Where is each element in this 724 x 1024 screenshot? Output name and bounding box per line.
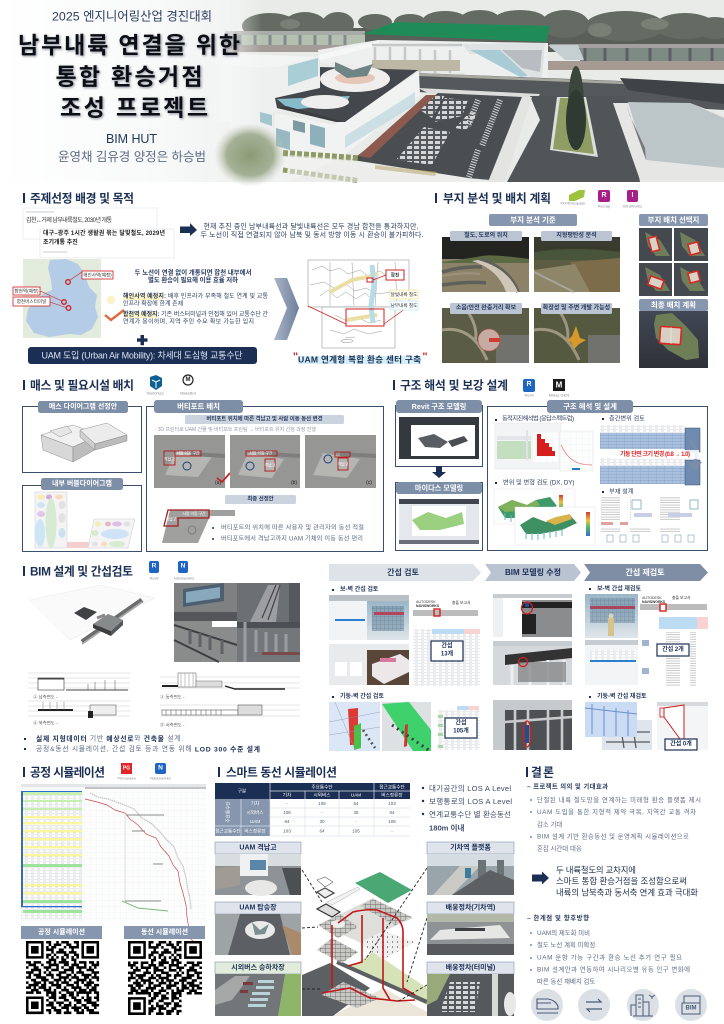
news card 1: 김천↔거제 남부내륙철도, 2030년 개통: [26, 216, 112, 224]
poster title: 통합 환승거점: [56, 64, 202, 90]
clash count 0: 간섭 0개: [670, 740, 692, 748]
image: terrain: [534, 237, 620, 292]
re-check: beam-wall: 보-벽 간섭 재검토: [597, 584, 641, 592]
elevation: south: [28, 673, 130, 700]
member design: 부재 설계: [609, 488, 634, 496]
distance table: 103: [283, 828, 291, 834]
software icons: R: [526, 381, 532, 388]
software icons: Revit: [524, 392, 534, 398]
distance table: 시외버스: [314, 792, 330, 798]
story drift review: 기둥 단면 크기 변경 (0.8 → 1.0): [620, 450, 690, 458]
photo b: [230, 435, 300, 488]
clash count 13: 13개: [441, 650, 453, 658]
UAM bar: [28, 347, 257, 364]
hero render: right building: [613, 102, 724, 180]
displacement review: [494, 478, 595, 545]
photo c: 격납고: [337, 460, 349, 466]
photo b: 사람 이동 구간: [249, 450, 273, 456]
response spectrum: 동적지진해석법 (응답스펙트럼): [502, 414, 574, 422]
modeling fix images: [493, 594, 572, 750]
image: final layout: [639, 311, 708, 368]
hero render: tree line: [242, 10, 724, 52]
pill: layout options: 부지 배치 선택지: [648, 216, 699, 224]
label pills for site images: 소음/안전 완충거리 확보: [456, 304, 517, 312]
distance table: UAM: [351, 792, 361, 798]
tile: intercity bus: 시외버스 승하차장: [231, 962, 285, 972]
team name: BIM HUT: [106, 132, 157, 146]
final selection model: 사람 이동 구간: [182, 511, 206, 516]
distance table: 103: [388, 801, 396, 806]
software icons: [146, 375, 197, 396]
distance table: 64: [319, 828, 325, 834]
software icons: N: [158, 764, 163, 772]
icon: exchange arrows: [578, 989, 610, 1021]
map labels: [13, 271, 113, 306]
bubbles: [35, 492, 135, 548]
pill: final layout: [639, 299, 708, 311]
UAM centre slogan: [293, 351, 428, 364]
elevation: north: ④ 북측면도 -: [33, 720, 58, 726]
panel: midas modeling: [396, 482, 482, 550]
poster title: 남부내륙 연결을 위한: [18, 32, 240, 58]
re-check: beam-wall: [585, 584, 708, 686]
elevation: west: [160, 705, 300, 728]
subheading pill: 버티포트 위치에 따른 격납고 및 사람 이동 동선 변경: [206, 414, 323, 422]
clash: beam-wall: [329, 585, 480, 686]
news card 2: [40, 229, 174, 258]
site reason text: 두 노선이 연결 없이 개통되면 합천 내부에서: [134, 268, 252, 276]
label pills for site images: [450, 231, 612, 314]
elevation: south: ② 남측면도 -: [33, 694, 58, 700]
tile: drop-off at station: 배웅정차(기차역): [446, 902, 495, 912]
image: expandability: [534, 308, 620, 363]
step arrow: modeling fix: BIM 모델링 수정: [505, 567, 561, 577]
LOS bullets: 보행통로의 LOS A Level: [429, 796, 512, 806]
photo b: (b): [291, 480, 297, 486]
UAM bar: UAM 도입 (Urban Air Mobility): 차세대 도심형 교통수단: [42, 350, 242, 360]
heading: 구조 해석 및 보강 설계: [400, 378, 508, 392]
photo a: (a): [215, 480, 221, 486]
LOS bullets: 180m 이내: [429, 822, 465, 832]
distance table: 주요통수단: [311, 784, 333, 790]
hero render: roads and parking: [352, 73, 724, 182]
re-check: column-wall: [585, 692, 708, 750]
panel: vertiport: 버티포트 배치: [177, 402, 220, 411]
midas screenshot: [399, 499, 479, 544]
axonometric exploded model: [302, 868, 427, 1016]
distance table: 접근교통수단: [379, 784, 405, 790]
news card 2: 조기개통 추진: [43, 238, 78, 246]
distance table: 30: [319, 819, 325, 824]
BIM bullets: [24, 734, 260, 753]
step arrow: re-check: 간섭 재검토: [625, 567, 665, 577]
section: clash review: [329, 564, 708, 751]
tile: rail platform: 기차역 플랫폼: [450, 842, 491, 852]
hero render: station building: [318, 22, 584, 78]
clash count 2: 간섭 2개: [662, 645, 684, 653]
significance list: 감소 기대: [537, 820, 562, 828]
hero render: pergolas: [225, 31, 724, 70]
photo b: 격납고: [264, 462, 276, 468]
clash report: NAVISWORKS: [416, 604, 440, 608]
UAM centre slogan: UAM 연계형 복합 환승 센터 구축: [298, 354, 421, 364]
icon: train: [531, 989, 563, 1021]
image: noise buffer: [442, 308, 529, 363]
panel: mass diagram: 매스 다이어그램 선정안: [49, 402, 118, 410]
poster title: 조성 프로젝트: [60, 94, 208, 120]
arrow: down: [432, 466, 446, 478]
software icons: N: [181, 562, 186, 570]
significance list: UAM 도입을 통한 지형적 제약 극복, 지역간 교통 격차: [537, 807, 696, 816]
label pills for site images: 확장성 및 주변 개발 가능성: [543, 304, 610, 312]
news card 2: 대구–광주 1시간 생활권 묶는 달빛철도, 2029년: [43, 229, 165, 237]
tile: drop-off at terminal: 배웅정차(터미널): [446, 962, 495, 972]
icon: BIM building: BIM: [686, 1006, 696, 1012]
clash report: AUTODESK: [416, 600, 436, 604]
site reason text: 별도 환승이 필요해 이용 효율 저하: [148, 275, 238, 284]
team members: 윤영채 김유경 양정은 하승범: [58, 150, 206, 164]
limitations list: BIM 설계안과 연동하여 시나리오별 유동 인구 변화에: [537, 964, 690, 974]
image: rail and road: [442, 237, 529, 292]
software icons: R: [152, 562, 157, 570]
poster title: [18, 32, 240, 120]
heading: 주제선정 배경 및 목적: [30, 192, 134, 206]
distance table: 버스정류장: [381, 792, 403, 798]
distance table: [215, 783, 410, 836]
distance table: -: [355, 819, 357, 824]
software icons: ReCap: [598, 204, 611, 208]
revit screenshot: [399, 417, 479, 459]
map labels: 합천역(예정): [14, 288, 39, 294]
re-check: column-wall: 기둥-벽 간섭 재검토: [597, 692, 647, 700]
photo c: [305, 435, 376, 488]
software icons: [149, 561, 194, 580]
step arrow: re-check: [584, 564, 708, 581]
distance table: 구분: [238, 788, 246, 794]
limitations list: UAM 운항 가능 구간과 환승 노선 추가 연구 필요: [537, 952, 682, 962]
BIM bullets: 실제 지형데이터 기반 예상선로와 건축물 설계.: [36, 734, 183, 742]
background statement: 두 노선이 직접 연결되지 않아 남북 및 동서 방향 이동 시 환승이 불가피하다.: [200, 230, 424, 239]
interior renders: [174, 583, 300, 662]
label: Dalbit line: 달빛내륙 철도: [391, 291, 417, 298]
BIM bullets: 공정&동선 시뮬레이션, 간섭 검토 등과 연동 위해 LOD 300 수준 설계: [36, 744, 260, 753]
icon: city and drone: [627, 989, 659, 1021]
event name: 2025 엔지니어링산업 경진대회: [52, 10, 212, 24]
pill: criteria: 부지 분석 기준: [510, 214, 556, 224]
distance table: 주요통수단: [224, 801, 232, 823]
panel: midas modeling: 마이다스 모델링: [415, 484, 463, 492]
dashed leader lines: [302, 868, 427, 1002]
clash: column-wall: [329, 692, 480, 751]
software icons: Midas GEN: [549, 392, 569, 398]
final selection model: 격납고: [165, 516, 177, 522]
re-check report: [640, 595, 708, 686]
label: Hapcheon: 합천: [391, 272, 399, 278]
arrow: [532, 872, 549, 884]
software icons: Revit: [149, 576, 159, 580]
location map: [13, 259, 113, 338]
label pills for site images: 철도, 도로의 위치: [464, 231, 508, 239]
software icons: M: [186, 377, 190, 383]
arrow: [180, 223, 197, 236]
site reason text: 연계가 용이하며, 지역 주민 수요 확보 가능한 입지: [123, 318, 254, 326]
clash: beam-wall: 보-벽 간섭 검토: [340, 585, 379, 593]
pill: circulation sim: [124, 926, 205, 939]
plus icon: [137, 335, 148, 345]
subheading pill: [185, 414, 344, 424]
clash count 13: 간섭: [441, 642, 453, 650]
distance table: 접근교통수단: [215, 828, 241, 834]
significance list: 혼잡 시간대 대응: [537, 844, 582, 852]
hero render: foreground tree: [214, 123, 286, 187]
photo a: 사람 이동 구간: [176, 450, 200, 456]
distance table: 64: [284, 819, 290, 824]
map labels: 해인사역(예정): [83, 272, 112, 278]
tile: rail platform: [427, 842, 514, 895]
software icons: PIX4Dmapper: [560, 200, 586, 206]
photo c: (c): [366, 480, 372, 486]
caption: : 3D 프린터로 UAM 건물 및 버티포트 프린팅 → 버티포트 위치 선정 과정 진행: [155, 425, 316, 433]
tile: intercity bus: [215, 962, 301, 1016]
distance table: 기차: [251, 800, 260, 807]
conclusion statement: 내륙의 남북축과 동서축 연계 효과 극대화: [556, 888, 698, 898]
panel: structural analysis and design: [488, 400, 708, 550]
software icons: Navisworks: [150, 776, 171, 780]
LOS bullets: [422, 783, 512, 832]
heading: 매스 및 필요시설 배치: [30, 378, 134, 392]
software icons: PG: [123, 766, 130, 772]
hero render: median with cypress: [550, 66, 598, 157]
layout option images: [639, 228, 708, 296]
site reason text: [105, 268, 268, 326]
elevation: east: [160, 673, 300, 700]
LOS bullets: 대기공간의 LOS A Level: [429, 783, 511, 793]
step arrow: modeling fix: [485, 564, 581, 581]
tile: drop-off at terminal: [427, 962, 516, 1016]
clash count 105: [445, 718, 477, 738]
limitations list: 철도 노선 계획 미확정: [537, 940, 595, 949]
conclusion statement: 두 내륙철도의 교차지에: [556, 865, 636, 875]
distance table: -: [321, 810, 323, 815]
elevation: north: [28, 701, 130, 726]
bullets: 버티포트에서 격납고까지 UAM 기체의 이동 동선 편리: [221, 534, 363, 542]
tile: drop-off at station: [427, 902, 514, 955]
story drift review: [600, 414, 702, 485]
icon: yellow dot: [107, 296, 115, 304]
distance table: UAM: [250, 819, 260, 824]
pill: final selection: 최종 선정안: [247, 494, 274, 502]
clash count 105: 간섭: [455, 718, 467, 726]
clash report: 충돌 보고서: [452, 600, 471, 605]
panel: revit modeling: Revit 구조 모델링: [412, 402, 466, 411]
pill: schedule sim: [21, 926, 102, 939]
distance table: -: [391, 828, 393, 834]
clash report: [413, 600, 480, 686]
section: mass and facilities: [22, 375, 384, 552]
pill: circulation sim: 동선 시뮬레이션: [141, 927, 188, 936]
section: schedule simulation: [21, 763, 206, 1015]
software icons: R: [601, 192, 607, 199]
limitations list: [530, 928, 690, 986]
site reason text: 해인사역 예정지: 배후 인프라가 부족해 철도 연계 및 교통: [123, 292, 268, 300]
gantt chart: [21, 784, 206, 948]
section: site analysis: [435, 190, 708, 368]
re-check report: 충돌 보고서: [672, 595, 691, 600]
column re-check report: [657, 702, 708, 750]
software icons: Navisworks: [174, 576, 194, 580]
panel: bubble diagram: 내부 버블다이어그램: [52, 478, 112, 488]
icon: checkmark: [105, 310, 124, 320]
hero render: landscaping: [283, 153, 470, 182]
software icons: Primavera: [117, 776, 136, 780]
mass model: [41, 423, 127, 462]
bullets: [212, 524, 364, 542]
response spectrum: [495, 414, 593, 471]
district map: [308, 260, 418, 348]
panel: revit modeling: [396, 400, 482, 466]
software icons: [523, 379, 569, 398]
heading: 스마트 동선 시뮬레이션: [226, 766, 337, 780]
column clash report: [438, 702, 480, 750]
distance table: 기차: [283, 792, 292, 798]
UAM centre slogan: ": [422, 351, 428, 363]
step arrow: clash review: 간섭 검토: [387, 567, 419, 577]
site reason text: 인프라 확장에 한계 존재: [123, 300, 183, 308]
distance table: -: [286, 801, 288, 806]
distance table: 64: [389, 810, 395, 815]
section: structural analysis: [393, 378, 708, 550]
bullets: 버티포트의 위치에 따른 사용자 및 관리자의 동선 적절: [221, 524, 364, 532]
QR code: schedule: [26, 941, 99, 1014]
software icons: M: [556, 380, 563, 390]
final selection model: [162, 510, 235, 543]
clash: column-wall: 기둥-벽 간섭 검토: [340, 692, 384, 700]
subheading: limitations: – 한계점 및 향후방향: [527, 913, 589, 922]
member design: [601, 488, 698, 542]
pill: criteria: [489, 214, 577, 226]
chevron arrow: [274, 278, 299, 340]
significance list: [530, 795, 701, 852]
re-check report: NAVISWORKS: [642, 600, 666, 604]
conclusion statement: [556, 865, 698, 898]
site reason text: 합천역 예정지: 기존 버스터미널과 인접해 있어 교통수단 간: [123, 310, 268, 318]
panel: mass diagram: [22, 401, 142, 472]
distance table: 35: [353, 810, 359, 815]
hero left white fade: [0, 0, 262, 182]
label: Nambu line: 남부내륙 철도: [391, 302, 417, 309]
section: topic background: [13, 192, 428, 364]
pill: final layout: 최종 배치 계획: [651, 300, 696, 310]
tile: UAM boarding: UAM 탑승장: [239, 902, 277, 912]
distance table: 시외버스: [247, 809, 263, 816]
QR code: circulation: [128, 941, 202, 1015]
limitations list: 따른 동선 재배치 검토: [537, 976, 595, 986]
distance table: 105: [318, 801, 326, 806]
elevation: east: ③ 동측면도 -: [160, 694, 185, 700]
red circulation routes: [322, 910, 415, 1001]
subheading: significance: – 프로젝트 의의 및 기대효과: [527, 782, 608, 790]
software icons: [117, 763, 171, 780]
distance table: 105: [283, 810, 291, 815]
tile: UAM hangar: [215, 842, 301, 896]
clash count 105: 105개: [453, 726, 469, 734]
heading: BIM 설계 및 간섭검토: [30, 564, 133, 578]
software icons: [560, 190, 642, 208]
panel: vertiport: [146, 400, 384, 552]
re-check report: AUTODESK: [642, 596, 662, 600]
significance list: BIM 설계 기반 환승동선 및 운영계획 시뮬레이션으로: [537, 832, 689, 840]
heading: 공정 시뮬레이션: [30, 766, 105, 780]
tile: UAM hangar: UAM 격납고: [239, 842, 277, 852]
step arrow: clash review: [329, 564, 481, 581]
software icons: I: [632, 192, 634, 199]
clash count 13: [431, 641, 463, 661]
panel: bubble diagram: [22, 478, 142, 552]
BIM isometric model: [30, 585, 155, 644]
heading: 결론: [531, 766, 554, 780]
pill: final selection: [225, 494, 296, 504]
icon: BIM building: [675, 989, 707, 1021]
displacement review: 변위 및 변형 검토 (DX, DY): [503, 478, 574, 486]
map labels: 합천버스터미널: [17, 298, 46, 305]
background statement: 현재 추진 중인 남부내륙선과 달빛내륙선은 모두 경남 합천을 통과하지만,: [204, 222, 419, 230]
news card 1: [23, 208, 157, 239]
photo a: 격납고: [164, 456, 175, 462]
conclusion statement: 스마트 통합 환승거점을 조성함으로써: [556, 876, 687, 886]
UAM centre slogan: ": [293, 351, 298, 363]
pill: layout options: [639, 214, 708, 226]
pill: schedule sim: 공정 시뮬레이션: [38, 927, 85, 936]
panel: structural analysis and design: 구조 해석 및 설계: [563, 402, 617, 411]
software icons: SketchUp: [146, 390, 164, 396]
story drift review: 층간변위 검토: [609, 414, 645, 422]
significance list: 단절된 내륙 철도망을 연계하는 미래형 환승 플랫폼 제시: [537, 795, 701, 804]
section: smart circulation: [215, 766, 516, 1016]
distance table: 105: [352, 828, 360, 834]
section: BIM design: [23, 561, 300, 753]
elevation: west: ⑤ 서측면도 -: [160, 722, 185, 728]
distance table: 버스정류장: [244, 828, 266, 834]
hero banner: [0, 0, 724, 187]
background statement: [200, 222, 424, 239]
tile: UAM boarding: [215, 902, 301, 955]
label pills for site images: 지형평탄성 분석: [556, 231, 597, 239]
map pins: [40, 272, 82, 310]
hero render: vertiport building: [214, 53, 420, 182]
heading: 부지 분석 및 배치 계획: [443, 192, 551, 206]
software icons: InfraWorks: [623, 204, 642, 208]
LOS bullets: 연계교통수단 별 환승동선: [429, 809, 511, 819]
photo a: [154, 435, 230, 488]
software icons: MakeBot: [180, 390, 197, 396]
limitations list: UAM의 제도화 미비: [537, 928, 590, 937]
section: conclusion: [526, 766, 707, 1021]
distance table: 64: [353, 801, 359, 806]
distance table: 105: [388, 819, 396, 824]
